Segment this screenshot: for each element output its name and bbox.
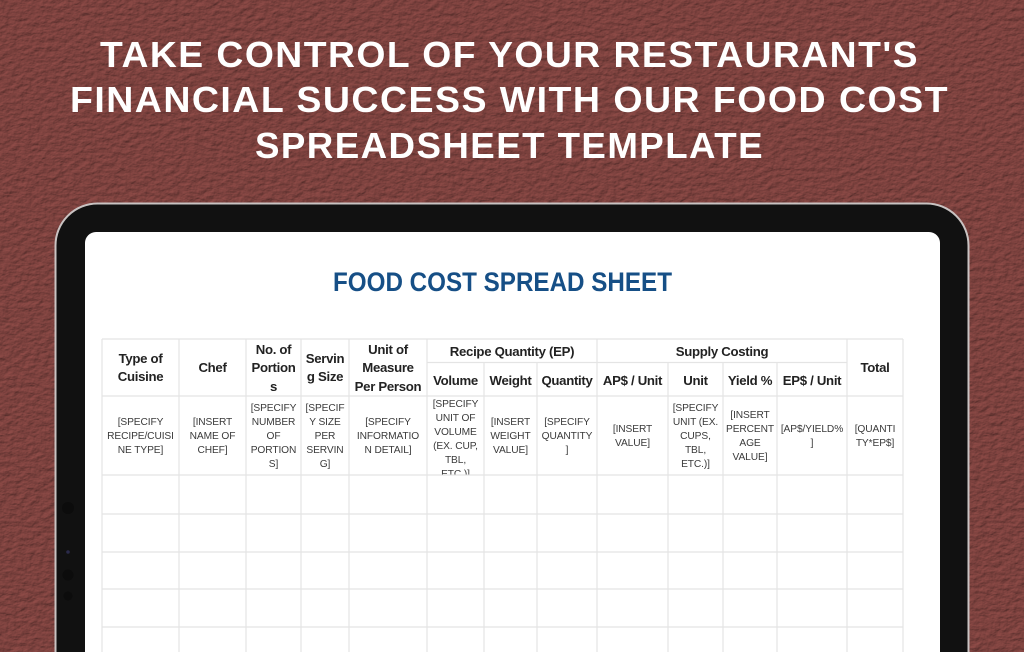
table header row: Unit — [683, 373, 709, 388]
table placeholder row: TY*EP$] — [856, 438, 894, 449]
table header row: EP$ / Unit — [783, 373, 842, 388]
table placeholder row: UNIT OF — [436, 413, 475, 424]
table placeholder row: PORTION — [251, 445, 296, 456]
spreadsheet heading: FOOD COST SPREAD SHEET — [333, 267, 672, 297]
table header row: s — [270, 379, 277, 394]
title — [70, 34, 949, 166]
table placeholder row: SERVIN — [306, 445, 344, 456]
table grid — [102, 339, 903, 652]
table header row: Chef — [198, 360, 227, 375]
table placeholder row: VALUE] — [615, 438, 650, 449]
table header row: Quantity — [541, 373, 594, 388]
tablet device — [56, 204, 968, 652]
table placeholder row: RECIPE/CUISI — [107, 431, 174, 442]
table placeholder row: VALUE] — [733, 452, 768, 463]
table header row: Type of — [119, 351, 163, 366]
table header row: Per Person — [355, 379, 422, 394]
table placeholder row: NAME OF — [190, 431, 235, 442]
table placeholder row: TBL, — [685, 445, 706, 456]
table placeholder row: CUPS, — [680, 431, 711, 442]
table placeholder row: QUANTITY — [542, 431, 593, 442]
table placeholder row: [SPECIFY — [673, 403, 719, 414]
table header row: No. of — [256, 342, 292, 357]
table placeholder row: PERCENT — [726, 424, 774, 435]
table placeholder row: [INSERT — [730, 410, 770, 421]
table header row: Yield % — [728, 373, 773, 388]
table placeholder row: TBL, — [445, 455, 466, 466]
table placeholder row: G] — [320, 459, 331, 470]
table header row — [118, 342, 890, 394]
table placeholder row: NE TYPE] — [118, 445, 163, 456]
table placeholder row: PER — [315, 431, 335, 442]
table header row: g Size — [307, 369, 343, 384]
table placeholder row: ETC.)] — [681, 459, 710, 470]
title: TAKE CONTROL OF YOUR RESTAURANT'S — [100, 34, 919, 75]
table placeholder row: UNIT (EX. — [673, 417, 718, 428]
table placeholder row: S] — [269, 459, 278, 470]
table placeholder row: CHEF] — [197, 445, 228, 456]
table header row: Volume — [433, 373, 478, 388]
tablet bezel — [56, 204, 968, 652]
table placeholder row: [INSERT — [613, 424, 652, 435]
table header row: Unit of — [368, 342, 409, 357]
table header row: Servin — [306, 351, 344, 366]
table placeholder row: [SPECIFY — [433, 399, 479, 410]
table placeholder row: [SPECIFY — [365, 417, 411, 428]
table placeholder row — [107, 399, 895, 480]
table header row: Weight — [490, 373, 532, 388]
table placeholder row: [SPECIFY — [251, 403, 297, 414]
table placeholder row: WEIGHT — [490, 431, 531, 442]
table header row: Measure — [362, 360, 414, 375]
table placeholder row: [INSERT — [193, 417, 232, 428]
table placeholder row: VOLUME — [434, 427, 477, 438]
table placeholder row: ETC.)] — [441, 469, 470, 480]
spreadsheet table — [102, 339, 903, 652]
table header row: AP$ / Unit — [603, 373, 663, 388]
icon: tablet camera and sensors — [62, 502, 74, 600]
table placeholder row: N DETAIL] — [364, 445, 412, 456]
table placeholder row: [INSERT — [491, 417, 530, 428]
table placeholder row: Y SIZE — [309, 417, 341, 428]
table header row: Total — [860, 360, 890, 375]
table placeholder row: [QUANTI — [855, 424, 895, 435]
title: SPREADSHEET TEMPLATE — [255, 125, 764, 166]
table placeholder row: OF — [267, 431, 280, 442]
table placeholder row: [SPECIF — [306, 403, 344, 414]
table placeholder row: NUMBER — [252, 417, 295, 428]
table placeholder row: VALUE] — [493, 445, 528, 456]
table placeholder row: [AP$/YIELD% — [781, 424, 843, 435]
table header row: Portion — [251, 360, 296, 375]
table placeholder row: (EX. CUP, — [433, 441, 478, 452]
table placeholder row: [SPECIFY — [118, 417, 164, 428]
title: FINANCIAL SUCCESS WITH OUR FOOD COST — [70, 79, 949, 120]
table placeholder row: INFORMATIO — [357, 431, 419, 442]
tablet screen — [85, 232, 940, 652]
table header row: Supply Costing — [676, 344, 768, 359]
table placeholder row: ] — [566, 445, 569, 456]
table placeholder row: ] — [811, 438, 814, 449]
table placeholder row: [SPECIFY — [544, 417, 590, 428]
table header row: Recipe Quantity (EP) — [450, 344, 574, 359]
table header row: Cuisine — [118, 369, 163, 384]
table placeholder row: AGE — [739, 438, 761, 449]
